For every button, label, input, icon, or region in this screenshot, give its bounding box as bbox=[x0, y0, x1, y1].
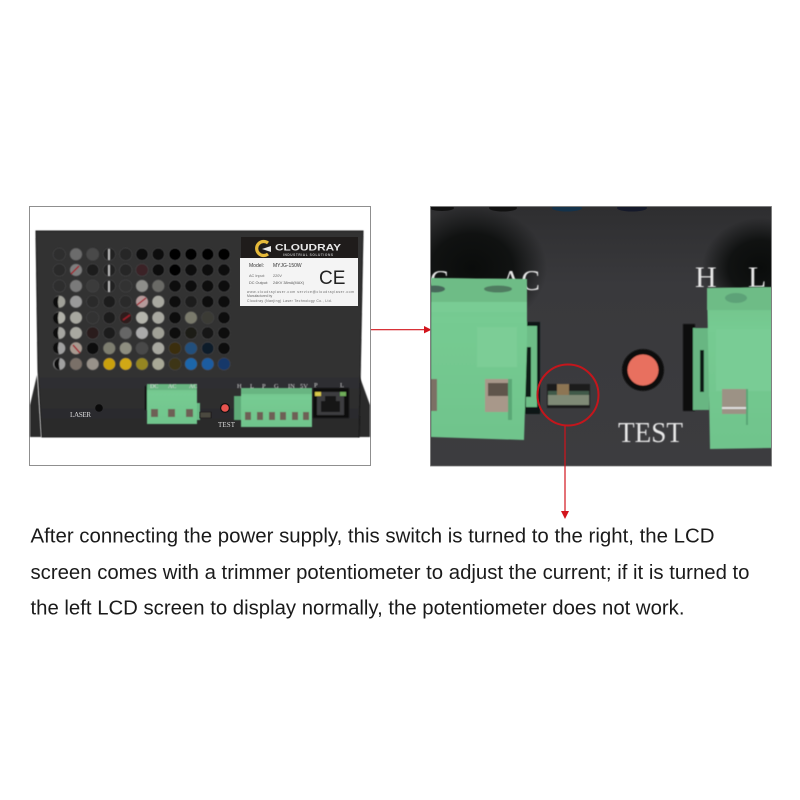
arrow: detail to explanation bbox=[561, 426, 569, 519]
product label: www.cloudraylaser.com service@cloudraylaser.com bbox=[247, 290, 354, 294]
terminal block: signal bbox=[234, 383, 312, 427]
terminal block: signal: 5V bbox=[300, 383, 308, 390]
explanation text: the left LCD screen to display normally, the potentiometer does not work. bbox=[30, 598, 684, 620]
left green terminal block bbox=[425, 278, 540, 440]
product label bbox=[240, 237, 358, 306]
product label: 24KV 38mA(MAX) bbox=[273, 281, 305, 285]
product label: Manufactured by bbox=[247, 294, 273, 298]
partial vent holes at top edge bbox=[430, 204, 647, 212]
highlight circle bbox=[538, 364, 598, 426]
RJ45 port: P bbox=[314, 382, 318, 389]
terminal block: signal: IN bbox=[288, 383, 295, 390]
logo mark bbox=[257, 242, 271, 256]
terminal block: signal: L bbox=[250, 383, 254, 390]
labels printed on the case: L bbox=[748, 261, 766, 294]
red test button bbox=[622, 349, 664, 391]
test button bbox=[218, 403, 236, 429]
product label: AC Input: bbox=[249, 274, 265, 278]
device side flanges bbox=[30, 372, 370, 437]
shadows above terminal blocks bbox=[397, 206, 547, 330]
terminal block: AC: AC bbox=[168, 384, 176, 390]
right green terminal block bbox=[683, 287, 772, 449]
product label: 220V bbox=[273, 274, 282, 278]
arrow: overview to detail bbox=[371, 326, 432, 333]
panel: power supply overview bbox=[30, 206, 370, 466]
terminal block: AC: DC bbox=[150, 384, 158, 390]
brand name: CLOUDRAY bbox=[275, 242, 342, 254]
device front face bbox=[36, 231, 363, 437]
RJ45 port: L bbox=[340, 382, 344, 389]
explanation text bbox=[30, 526, 750, 620]
TEST label: TEST bbox=[618, 417, 683, 449]
product label: DC Output: bbox=[249, 281, 268, 285]
terminal block: AC bbox=[145, 384, 200, 424]
CE mark: CE bbox=[319, 268, 345, 289]
terminal block: signal: G bbox=[274, 383, 279, 390]
terminal block: signal: H bbox=[237, 383, 242, 390]
product label: Cloudray (Nanjing) Laser Technology Co., Ltd. bbox=[247, 299, 332, 303]
product label: MYJG-150W bbox=[273, 263, 302, 269]
model and spec text: Model: bbox=[249, 263, 264, 269]
laser port: LASER bbox=[70, 411, 91, 419]
laser port bbox=[70, 404, 103, 419]
labels printed on the case: C bbox=[430, 266, 449, 297]
terminal block: signal: P bbox=[262, 383, 266, 390]
product label: INDUSTRIAL SOLUTIONS bbox=[283, 253, 333, 257]
RJ45 port bbox=[313, 382, 349, 418]
slide switch bbox=[547, 384, 590, 408]
labels printed on the case: AC bbox=[501, 266, 540, 297]
panel: enlarged detail photo bbox=[397, 204, 800, 466]
ventilation holes bbox=[53, 248, 230, 370]
labels printed on the case bbox=[430, 261, 766, 297]
explanation text: After connecting the power supply, this switch is turned to the right, the LCD bbox=[30, 526, 714, 548]
explanation text: screen comes with a trimmer potentiometer to adjust the current; if it is turned to bbox=[30, 562, 750, 584]
terminal block: AC: AC bbox=[189, 384, 197, 390]
test button: TEST bbox=[218, 421, 236, 429]
slide switch bbox=[200, 412, 211, 418]
labels printed on the case: H bbox=[695, 261, 717, 294]
